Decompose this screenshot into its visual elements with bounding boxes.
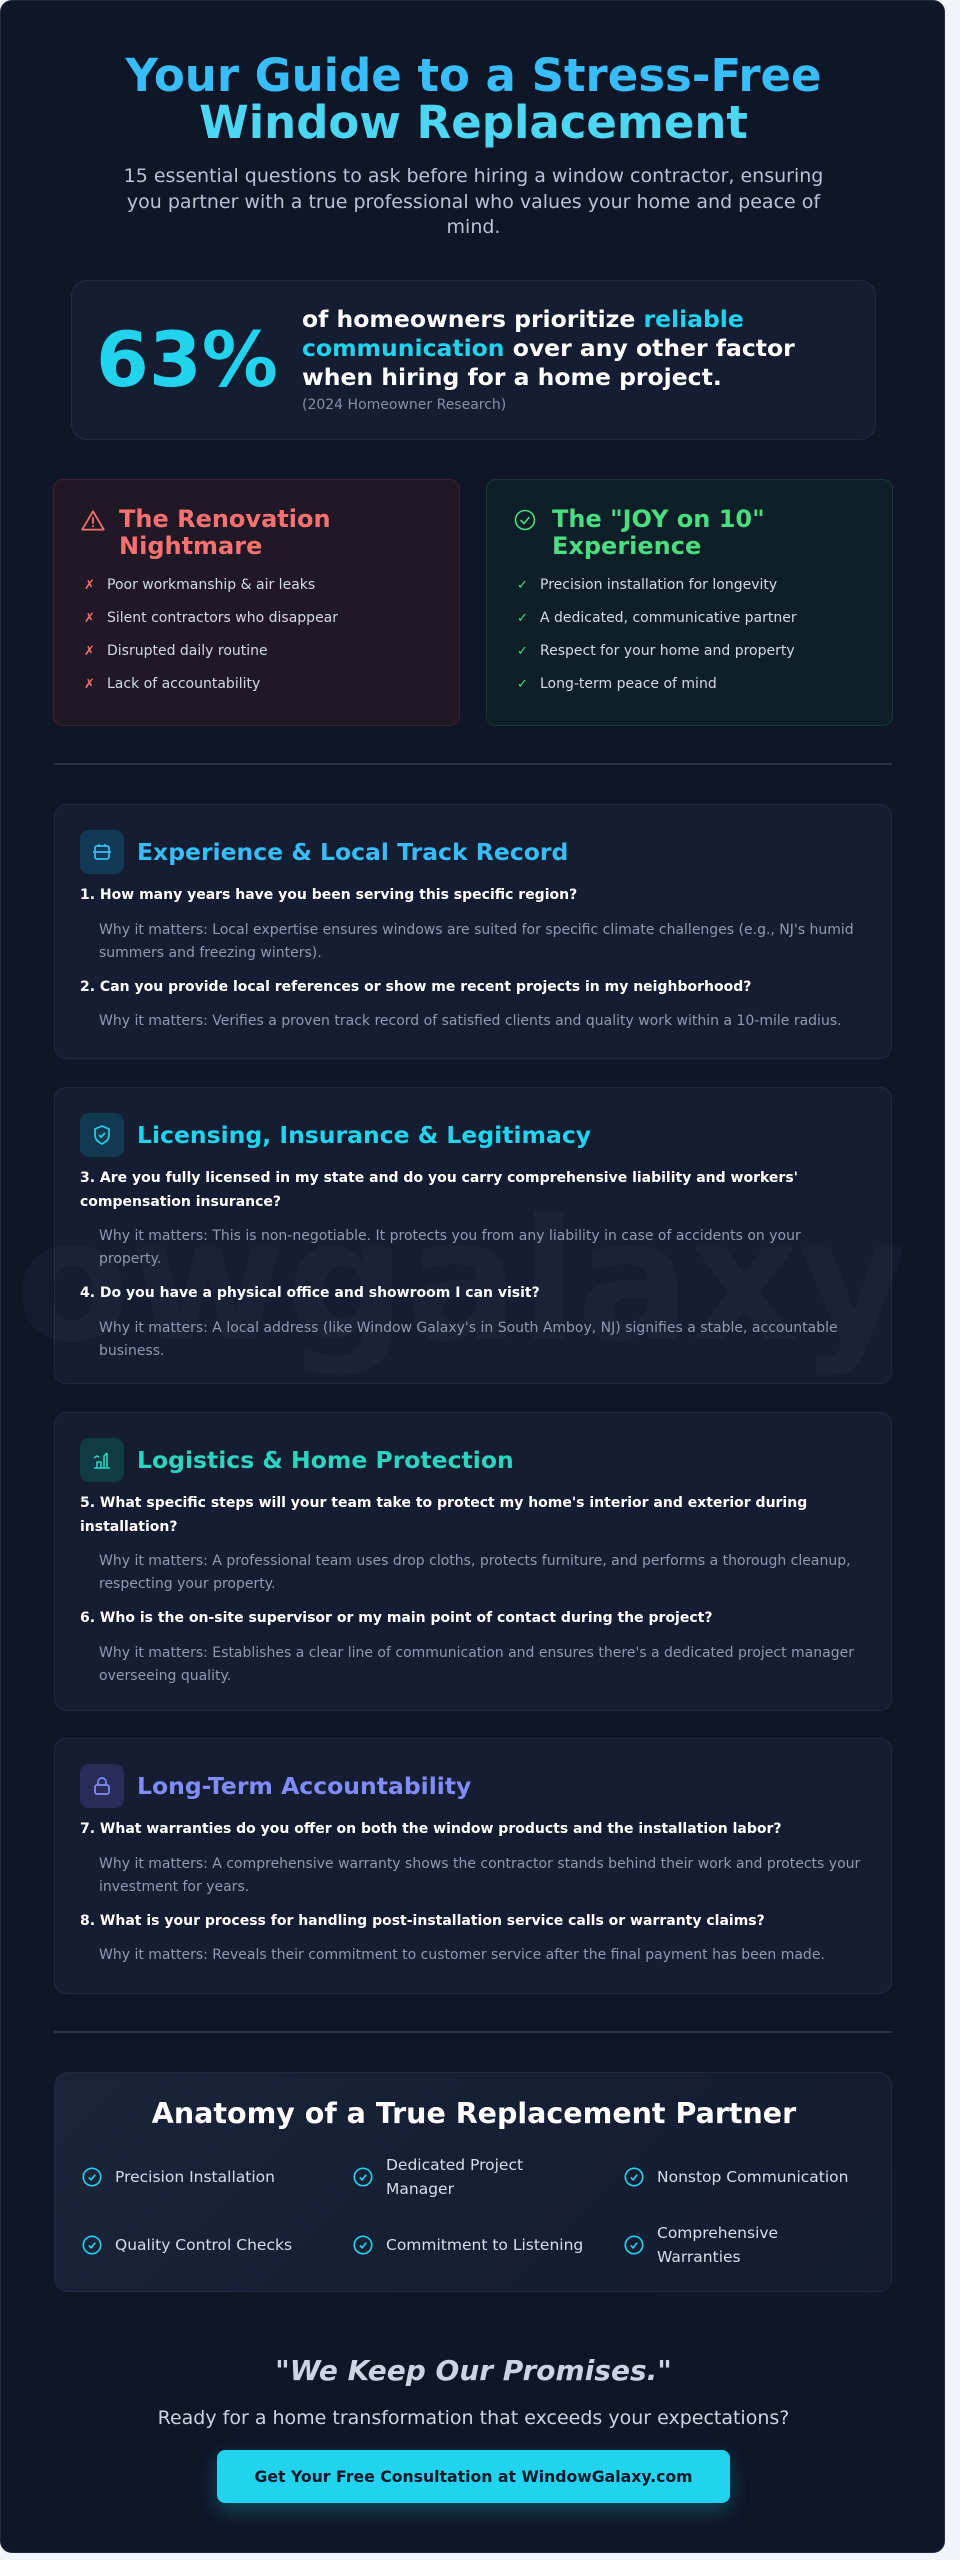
- list: Respect for your home and property: [540, 643, 795, 659]
- questions: Why it matters: Verifies a proven track record of satisfied clients and quality work within a 10-mile radius.: [99, 1013, 842, 1029]
- questions: Why it matters: This is non-negotiable. It protects you from any liability in case of accidents on your property.: [99, 1228, 801, 1267]
- section heading: [80, 1764, 471, 1808]
- list: Long-term peace of mind: [540, 676, 717, 692]
- panel: joy on 10: [486, 479, 893, 726]
- list: Disrupted daily routine: [107, 643, 268, 659]
- panel: anatomy of a partner: Commitment to Listening: [386, 2236, 583, 2254]
- heading: Anatomy of a True Replacement Partner: [152, 2097, 796, 2130]
- questions: 6. Who is the on-site supervisor or my main point of contact during the project?: [80, 1610, 712, 1626]
- stat text: of homeowners prioritize reliable communication over any other factor when hiring for a home project.: [302, 305, 795, 391]
- questions: 3. Are you fully licensed in my state and do you carry comprehensive liability and workers' compensation insurance?: [80, 1170, 798, 1210]
- list: ✓: [517, 644, 528, 659]
- section heading: Licensing, Insurance & Legitimacy: [137, 1121, 591, 1149]
- big number: 63%: [96, 315, 278, 404]
- questions: [80, 887, 854, 1029]
- list: ✗: [84, 578, 95, 593]
- section: accountability: [54, 1738, 892, 1994]
- stat callout: 63%: [71, 280, 876, 440]
- section heading: Experience & Local Track Record: [137, 838, 568, 866]
- section heading: Long-Term Accountability: [137, 1772, 471, 1800]
- heading: Nightmare: [119, 532, 262, 560]
- section heading: [80, 1113, 591, 1157]
- title: Your Guide to a Stress-Free: [125, 49, 822, 102]
- heading: [119, 505, 331, 560]
- cta button: Get Your Free Consultation at WindowGalaxy.com: [254, 2467, 693, 2486]
- list: [517, 577, 797, 692]
- section heading: Logistics & Home Protection: [137, 1446, 514, 1474]
- quote: "We Keep Our Promises.": [275, 2354, 672, 2387]
- list: Silent contractors who disappear: [107, 610, 338, 626]
- questions: Why it matters: A comprehensive warranty shows the contractor stands behind their work and protects your investment for years.: [99, 1856, 860, 1894]
- section: logistics: [54, 1412, 892, 1711]
- list: Precision installation for longevity: [540, 577, 777, 593]
- panel: anatomy of a partner: Nonstop Communication: [657, 2168, 848, 2186]
- list: [84, 577, 338, 692]
- icon: warning: [81, 510, 105, 530]
- questions: 7. What warranties do you offer on both the window products and the installation labor?: [80, 1821, 782, 1837]
- heading: The "JOY on 10": [552, 505, 765, 533]
- list: Lack of accountability: [107, 676, 260, 692]
- list: ✗: [84, 611, 95, 626]
- panel: anatomy of a partner: [54, 2072, 892, 2292]
- list: ✓: [517, 578, 528, 593]
- section: licensing: [54, 1087, 892, 1384]
- heading: The Renovation: [119, 505, 331, 533]
- questions: Why it matters: A local address (like Window Galaxy's in South Amboy, NJ) signifies a stable, accountable business.: [99, 1320, 838, 1358]
- questions: 5. What specific steps will your team take to protect my home's interior and exterior during installation?: [80, 1495, 807, 1534]
- questions: [80, 1170, 838, 1358]
- questions: Why it matters: A professional team uses drop cloths, protects furniture, and performs a thorough cleanup, respecting your property.: [99, 1553, 851, 1592]
- cta button: [217, 2450, 730, 2503]
- questions: [80, 1495, 854, 1684]
- panel: anatomy of a partner: Warranties: [657, 2248, 741, 2266]
- questions: 4. Do you have a physical office and showroom I can visit?: [80, 1285, 540, 1301]
- list: ✗: [84, 644, 95, 659]
- heading: [552, 505, 765, 560]
- questions: [80, 1821, 860, 1963]
- subtitle: 15 essential questions to ask before hiring a window contractor, ensuring you partner with a true professional who values your home and peace of mind.: [124, 165, 823, 238]
- closing text: Ready for a home transformation that exceeds your expectations?: [158, 2407, 789, 2429]
- section heading: [80, 830, 568, 874]
- title: [125, 49, 822, 149]
- list: Poor workmanship & air leaks: [107, 577, 315, 593]
- panel: renovation nightmare: [53, 479, 460, 726]
- panel: anatomy of a partner: Manager: [386, 2180, 454, 2198]
- list: ✗: [84, 677, 95, 692]
- questions: Why it matters: Establishes a clear line of communication and ensures there's a dedicated project manager overseeing quality.: [99, 1644, 854, 1684]
- questions: 1. How many years have you been serving this specific region?: [80, 887, 577, 903]
- list: ✓: [517, 611, 528, 626]
- section: experience: [54, 804, 892, 1059]
- title: Window Replacement: [199, 96, 748, 149]
- list: ✓: [517, 677, 528, 692]
- heading: Experience: [552, 532, 701, 560]
- stat text: (2024 Homeowner Research): [302, 397, 506, 413]
- questions: Why it matters: Local expertise ensures windows are suited for specific climate challenges (e.g., NJ's humid summers and freezing winters).: [99, 922, 854, 960]
- questions: Why it matters: Reveals their commitment to customer service after the final payment has been made.: [99, 1947, 825, 1963]
- watermark text: owgalaxy: [15, 1183, 908, 1379]
- list: A dedicated, communicative partner: [540, 610, 797, 626]
- panel: anatomy of a partner: Comprehensive: [657, 2224, 778, 2242]
- section heading: [80, 1438, 514, 1482]
- feature items: Precision Installation: [115, 2168, 275, 2186]
- panel: anatomy of a partner: Dedicated Project: [386, 2156, 523, 2174]
- panel: anatomy of a partner: Quality Control Checks: [115, 2236, 292, 2254]
- questions: 2. Can you provide local references or show me recent projects in my neighborhood?: [80, 978, 751, 994]
- icon: check circle: [514, 510, 536, 530]
- questions: 8. What is your process for handling post-installation service calls or warranty claims?: [80, 1912, 765, 1928]
